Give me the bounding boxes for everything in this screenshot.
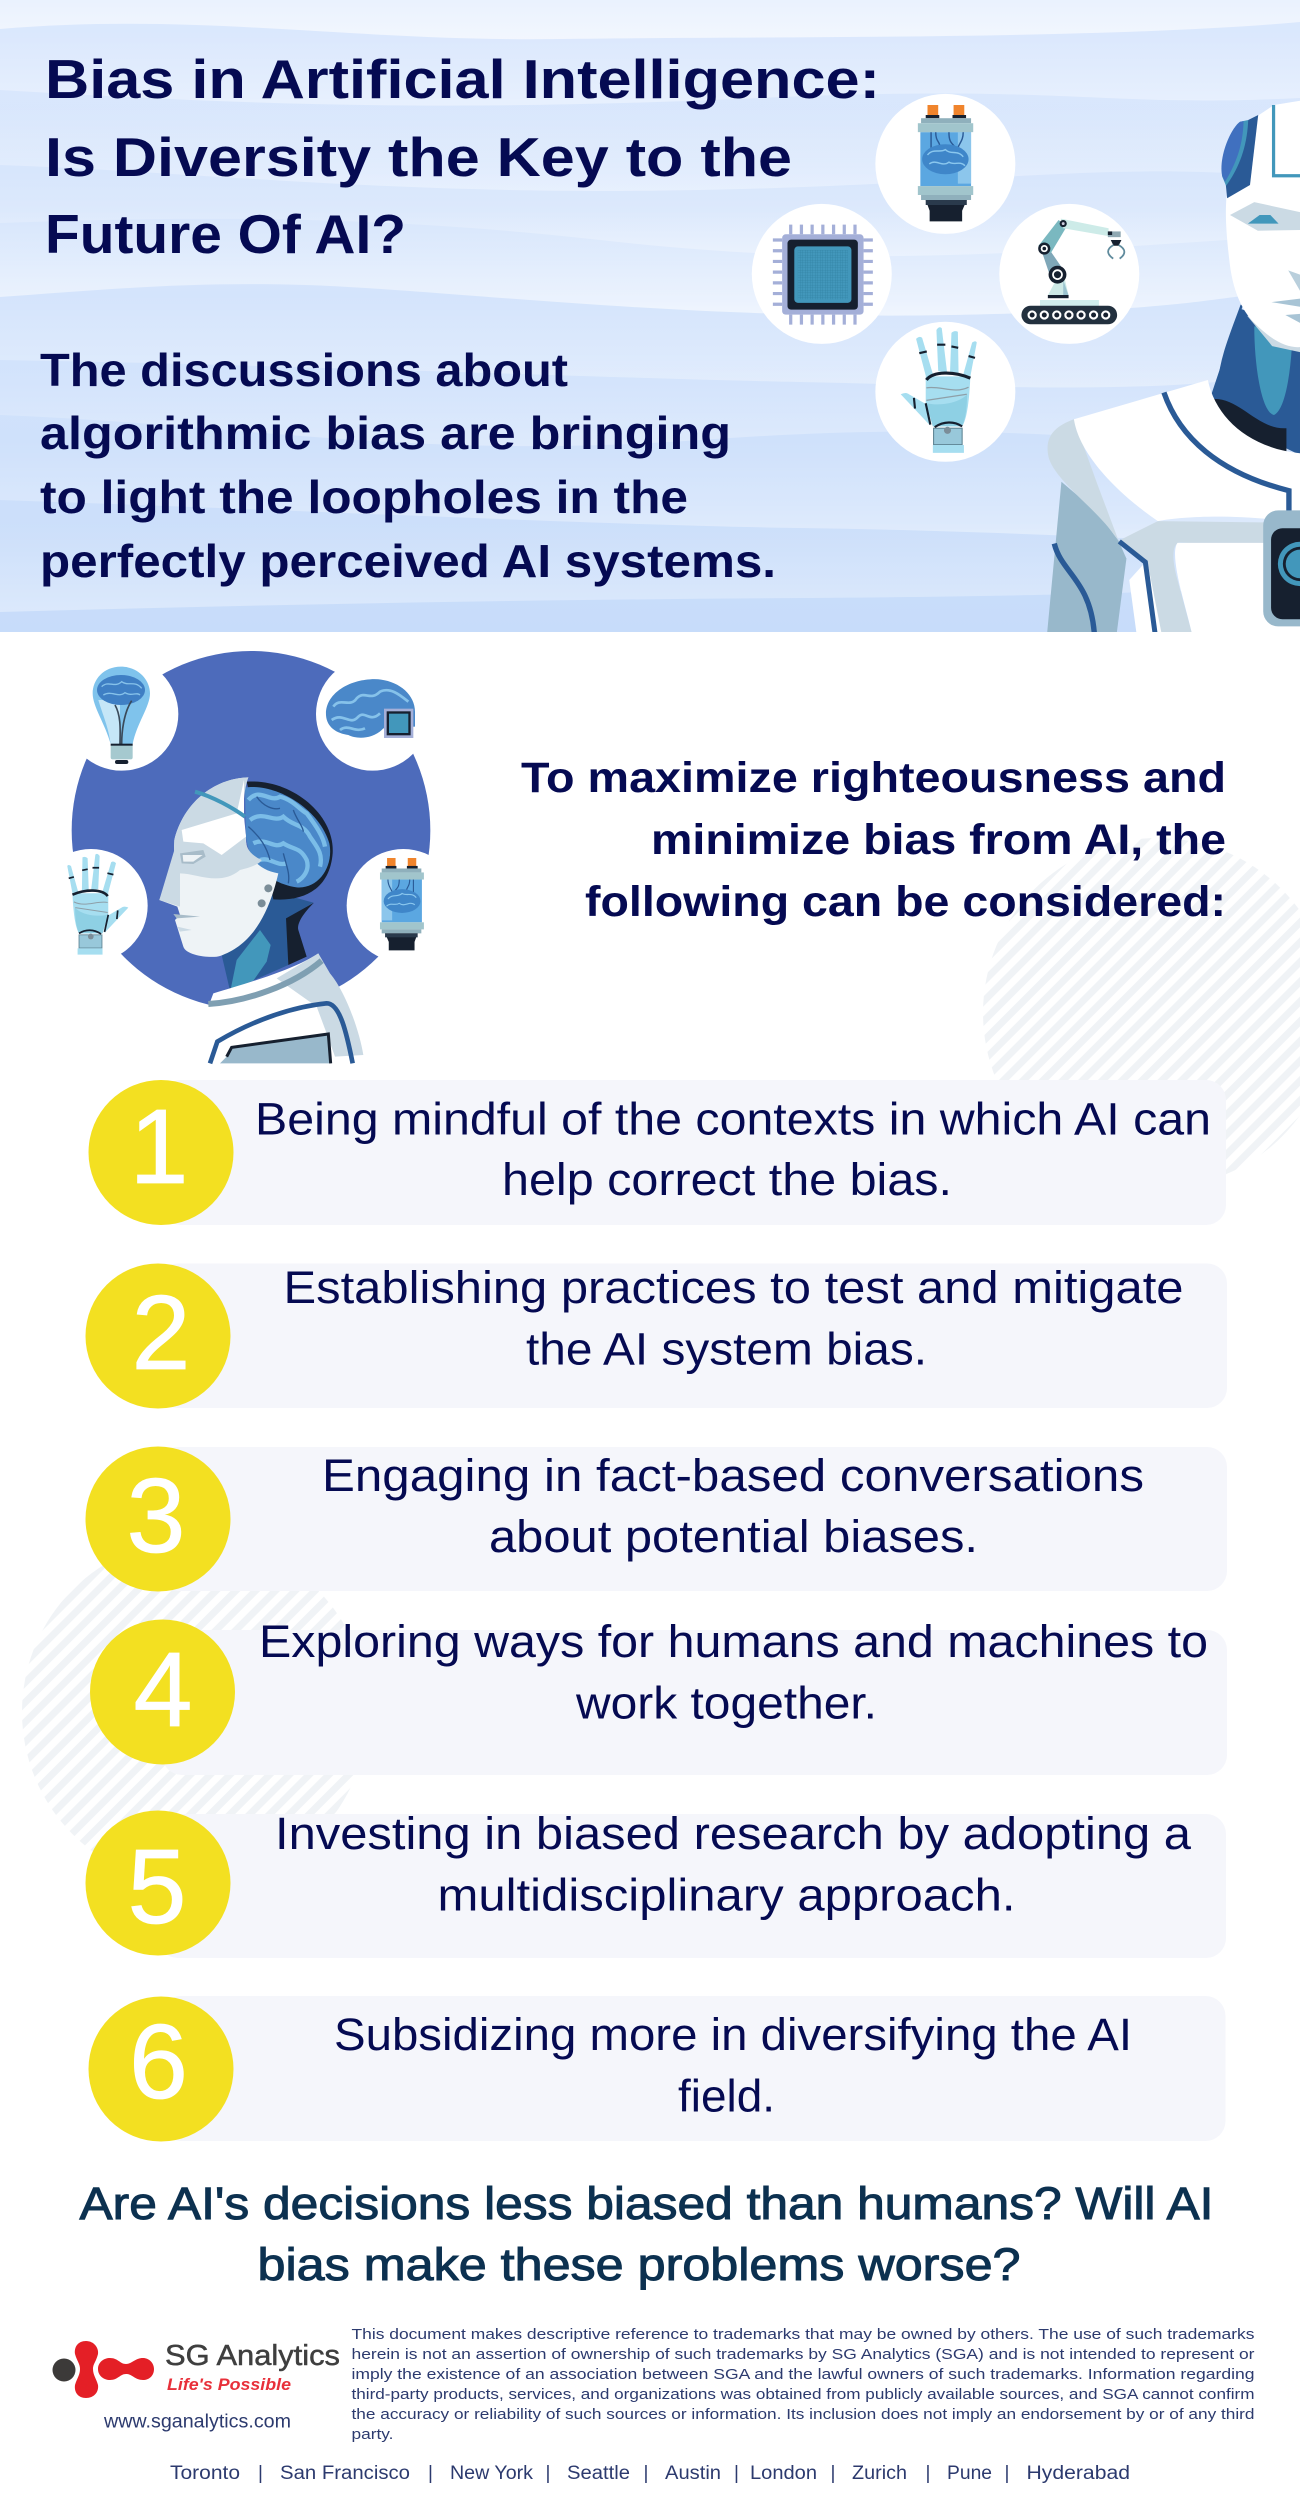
section heading: [521, 754, 1226, 926]
hero subtitle: [40, 344, 776, 587]
icon: brain tank small: [347, 849, 460, 962]
legal disclaimer: third-party products, services, and organizations was obtained from publicly available sources, and SGA cannot confirm: [352, 2387, 1254, 2403]
icon: microchip: [752, 204, 892, 344]
legal disclaimer: herein is not an assertion of ownership of such trademarks by SG Analytics (SGA) and is not intended to represent or: [352, 2347, 1255, 2363]
legal disclaimer: [352, 2327, 1255, 2443]
hero background: [0, 0, 1300, 632]
icon: robot arm: [999, 204, 1139, 344]
step 6: Subsidizing more in diversifying the AI: [334, 2009, 1132, 2060]
hero illustration group: [752, 94, 1300, 633]
logo: Life's Possible: [167, 2376, 291, 2394]
robot head profile: [159, 777, 333, 991]
website: www.sganalytics.com: [103, 2412, 291, 2432]
step 6: field.: [678, 2070, 775, 2122]
step 4: work together.: [575, 1678, 877, 1728]
step 2: Establishing practices to test and mitigate: [284, 1262, 1184, 1313]
office cities: |: [1004, 2463, 1009, 2484]
step 3: 3: [127, 1457, 185, 1575]
logo: [52, 2340, 340, 2398]
hero subtitle: The discussions about: [40, 344, 568, 396]
office cities: Austin: [665, 2463, 721, 2484]
hero subtitle: to light the loopholes in the: [40, 471, 688, 523]
office cities: Hyderabad: [1026, 2463, 1130, 2484]
step 5: [86, 1808, 1226, 1958]
closing question: [80, 2178, 1214, 2290]
step 1: 1: [130, 1088, 188, 1206]
striped background circle right: [983, 838, 1300, 1188]
step 2: 2: [132, 1274, 190, 1392]
icon: robotic hand: [875, 322, 1015, 462]
closing question: Are AI's decisions less biased than humans? Will AI: [80, 2178, 1214, 2229]
office cities: [170, 2463, 1130, 2484]
office cities: |: [830, 2463, 835, 2484]
step 6: 6: [129, 2003, 188, 2121]
step 5: multidisciplinary approach.: [438, 1870, 1016, 1920]
legal disclaimer: imply the existence of an association between SGA and the lawful owners of such trademarks. Information regarding: [352, 2367, 1254, 2383]
step 2: [86, 1262, 1227, 1408]
hero subtitle: perfectly perceived AI systems.: [40, 535, 776, 587]
office cities: New York: [450, 2463, 534, 2484]
side robot illustration: [34, 651, 460, 1063]
robot suit: [208, 953, 363, 1063]
logo: SG Analytics: [165, 2340, 340, 2372]
hero title: Future Of AI?: [45, 203, 406, 265]
section heading: To maximize righteousness and: [521, 754, 1226, 802]
office cities: |: [258, 2463, 263, 2484]
office cities: |: [734, 2463, 739, 2484]
office cities: |: [546, 2463, 550, 2484]
section heading: following can be considered:: [585, 878, 1226, 926]
blue disc: [72, 651, 430, 1010]
office cities: San Francisco: [280, 2463, 410, 2484]
step 2: the AI system bias.: [526, 1324, 927, 1374]
step 5: 5: [128, 1828, 186, 1946]
step 5: Investing in biased research by adopting a: [275, 1808, 1192, 1859]
step 1: [88, 1080, 1226, 1225]
step 3: Engaging in fact-based conversations: [322, 1450, 1144, 1501]
icon: light bulb brain: [65, 657, 178, 771]
striped background circle left: [22, 1539, 368, 1885]
office cities: Toronto: [170, 2463, 240, 2484]
step 4: [90, 1616, 1227, 1775]
legal disclaimer: the accuracy or reliability of such sources or information. Its inclusion does not imply an endorsement by or of any third: [352, 2407, 1254, 2423]
office cities: Pune: [947, 2463, 992, 2484]
section heading: minimize bias from AI, the: [651, 816, 1226, 864]
icon: brain tank: [875, 94, 1015, 234]
hero title: Bias in Artificial Intelligence:: [45, 48, 880, 110]
legal disclaimer: party.: [352, 2427, 394, 2443]
office cities: Seattle: [567, 2463, 630, 2484]
hero subtitle: algorithmic bias are bringing: [40, 407, 731, 459]
step 3: about potential biases.: [489, 1511, 978, 1562]
office cities: London: [750, 2463, 817, 2484]
step 1: help correct the bias.: [502, 1154, 952, 1205]
closing question: bias make these problems worse?: [258, 2239, 1020, 2290]
robot figure: [1047, 101, 1300, 633]
hero title: [45, 48, 880, 265]
office cities: |: [644, 2463, 648, 2484]
office cities: Zurich: [852, 2463, 907, 2484]
step 4: Exploring ways for humans and machines to: [259, 1616, 1208, 1667]
step 4: 4: [134, 1631, 192, 1749]
legal disclaimer: This document makes descriptive reference to trademarks that may be owned by others. The use of such trademarks: [352, 2327, 1254, 2343]
office cities: |: [428, 2463, 433, 2484]
step 6: [88, 1996, 1226, 2142]
icon: brain with chip: [316, 657, 429, 771]
step 1: Being mindful of the contexts in which AI can: [255, 1094, 1211, 1144]
office cities: |: [926, 2463, 930, 2484]
step 3: [86, 1446, 1227, 1592]
hero title: Is Diversity the Key to the: [45, 126, 792, 188]
icon: robotic hand small: [34, 849, 148, 962]
